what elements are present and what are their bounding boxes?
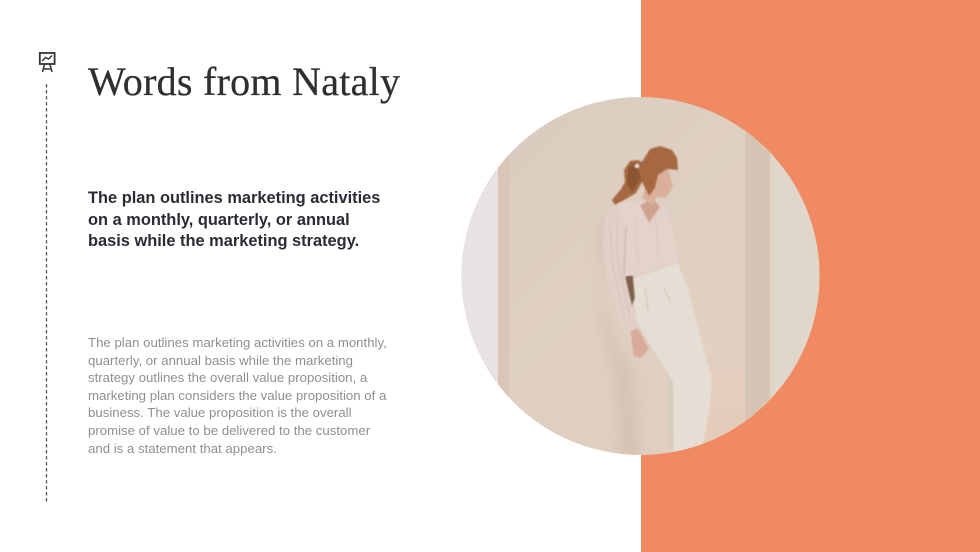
circular photo of a woman leaning on a wall [462,97,820,455]
lead text block: The plan outlines marketing activities [88,189,380,207]
body text block: marketing plan considers the value proposition of a [88,388,386,403]
wall background [460,95,822,460]
lead text block: basis while the marketing strategy. [88,232,359,250]
icon: presentation board [38,52,56,72]
body text block [88,335,387,456]
hair [612,146,678,205]
body text block: quarterly, or annual basis while the marketing [88,353,353,368]
body text block: strategy outlines the overall value proposition, a [88,370,367,385]
pants [632,263,712,455]
lead text block [88,189,380,250]
lead text block: on a monthly, quarterly, or annual [88,210,350,228]
hand [631,328,649,358]
orange side panel [641,0,980,552]
sleeve [604,203,633,309]
body text block: The plan outlines marketing activities on a monthly, [88,335,387,350]
body text block: business. The value proposition is the overall [88,405,352,420]
shirt body [618,200,678,277]
body text block: promise of value to be delivered to the customer [88,423,370,438]
body text block: and is a statement that appears. [88,441,277,456]
title: Words from Nataly [88,59,400,104]
neck and collar [640,199,660,223]
face [642,169,674,204]
woman figure [603,146,712,455]
shaded hip [623,275,635,308]
dashed timeline line [46,84,48,502]
